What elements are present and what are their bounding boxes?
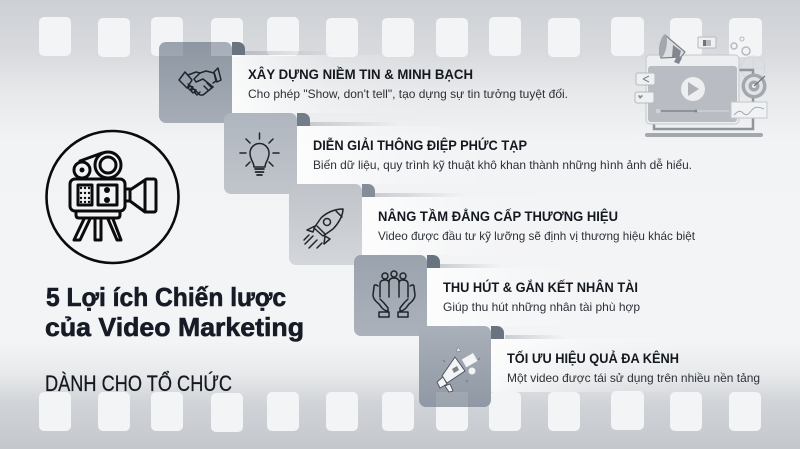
title — [45, 282, 304, 342]
step 1: build trust: Cho phép "Show, don't tell", tạo dựng sự tin tưởng tuyệt đối. — [248, 87, 568, 101]
title: 5 Lợi ích Chiến lược — [46, 282, 286, 312]
icon: hands with people — [373, 271, 415, 317]
text: step 3: NÂNG TẦM ĐẲNG CẤP THƯƠNG HIỆU — [378, 209, 618, 224]
icon: handshake — [179, 68, 221, 95]
step 1: build trust — [159, 42, 568, 123]
title: của Video Marketing — [45, 312, 304, 342]
subtitle: DÀNH CHO TỔ CHỨC — [45, 371, 232, 396]
icon: rocket — [304, 209, 343, 248]
film strip holes: bottom — [39, 391, 761, 432]
step 4: attract talent — [354, 255, 640, 336]
step 2: explain complex messages: Biến dữ liệu, quy trình kỹ thuật khô khan thành những hình ảnh dễ hiểu. — [313, 157, 692, 172]
step 2: explain complex messages — [224, 113, 692, 194]
step 5: multi-channel — [419, 326, 760, 407]
illustration: laptop video marketing — [635, 34, 767, 137]
film strip holes: top — [39, 17, 762, 57]
icon: light bulb — [240, 133, 279, 175]
step 5: multi-channel: Một video được tái sử dụng trên nhiều nền tảng — [507, 371, 760, 385]
text: step 1: XÂY DỰNG NIỀM TIN & MINH BẠCH — [248, 67, 473, 82]
step 4: attract talent: Giúp thu hút những nhân tài phù hợp — [443, 300, 640, 314]
icon: video camera in circle — [46, 131, 178, 263]
step 3: elevate brand — [289, 184, 696, 265]
icon: megaphone with messages — [437, 347, 480, 392]
step 3: elevate brand: Video được đầu tư kỹ lưỡng sẽ định vị thương hiệu khác biệt — [378, 229, 696, 243]
text: step 4: THU HÚT & GẮN KẾT NHÂN TÀI — [443, 280, 638, 295]
text: step 2: DIỄN GIẢI THÔNG ĐIỆP PHỨC TẠP — [313, 138, 527, 153]
text: step 5: TỐI ƯU HIỆU QUẢ ĐA KÊNH — [507, 351, 679, 366]
